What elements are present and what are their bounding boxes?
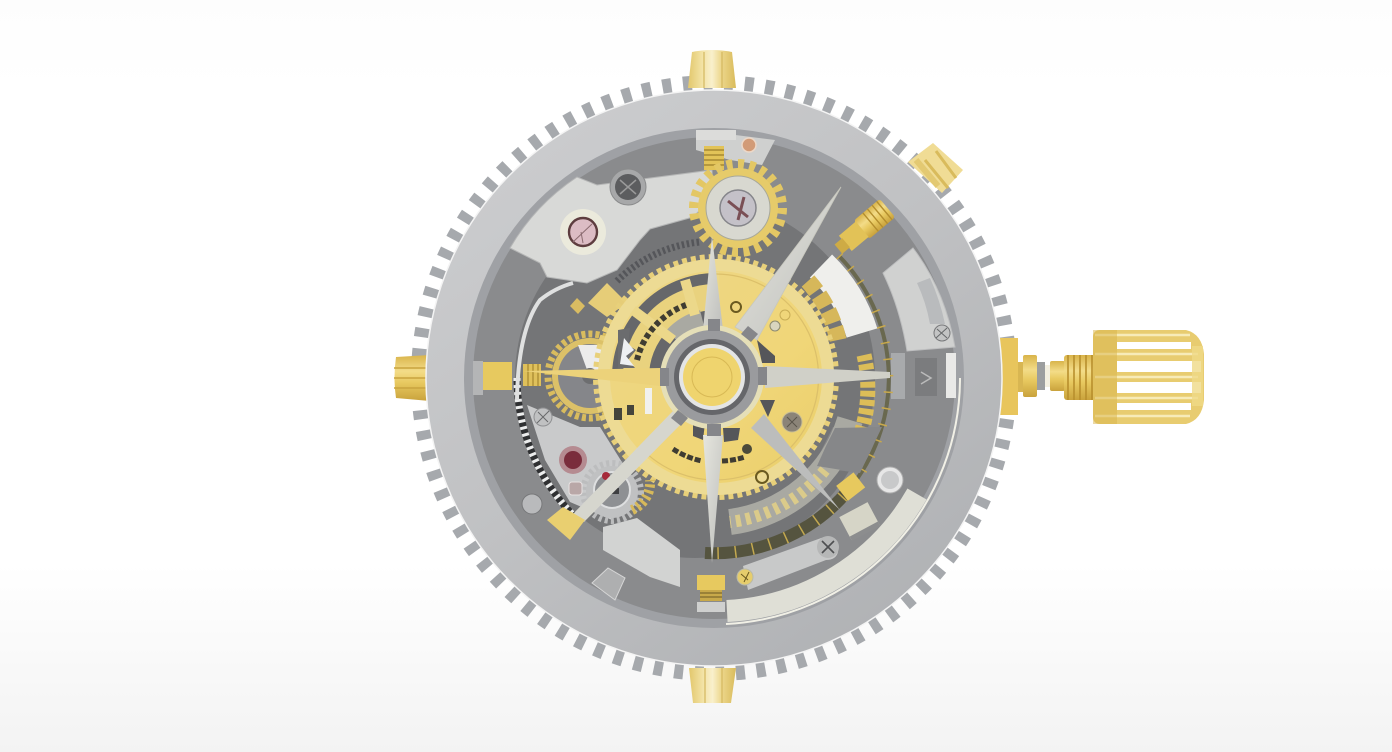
triangle marker <box>592 568 625 600</box>
movement base plate <box>473 137 955 619</box>
gear teeth rim <box>419 83 1009 673</box>
knob: bottom <box>689 668 736 703</box>
gear: lower grey-gold arc <box>730 420 850 522</box>
plate: upper left bridge <box>510 170 713 283</box>
plate: top block with copper jewel <box>696 130 775 170</box>
wheel spokes <box>633 272 716 340</box>
inner recess <box>515 198 875 558</box>
bottom post <box>697 575 725 612</box>
chain ring bottom <box>705 483 854 553</box>
sector overlay lower right <box>817 427 882 473</box>
wheel lower left pieces <box>614 388 652 420</box>
crown knurled head <box>1093 330 1204 424</box>
gold screw upper right <box>831 199 895 258</box>
screw: small pink <box>569 482 582 495</box>
inner bezel bevel <box>464 128 964 628</box>
ridged gold stack right <box>862 355 868 430</box>
small jewel on wheel <box>770 310 790 331</box>
wheel white sprocket left <box>618 328 636 368</box>
screw: grey hatch <box>534 408 552 426</box>
crown stem <box>1018 355 1050 397</box>
screw: cream jewel upper left <box>560 209 606 255</box>
wheel inner gold band <box>636 297 716 377</box>
screw on wheel <box>782 412 802 432</box>
gold block lower right <box>836 472 865 501</box>
wheel inner grey block <box>672 318 702 336</box>
crown base collar <box>1000 338 1018 415</box>
plate: lower right cream arc <box>727 494 917 611</box>
wheel pale rim <box>604 265 828 489</box>
screw: lever gold <box>737 569 753 585</box>
plate: upper right <box>883 248 955 351</box>
outer silver bezel ring <box>426 90 1002 666</box>
gear: large central wheel <box>596 257 836 497</box>
hand: upper right <box>735 187 841 340</box>
hand: down <box>703 435 723 563</box>
lever lower right <box>743 537 838 590</box>
wheel toothed rim <box>596 257 836 497</box>
lower right highlight line <box>726 378 960 624</box>
knob: top <box>688 50 736 88</box>
spring: top <box>704 146 724 170</box>
hand: lower left with gold cap <box>547 411 684 540</box>
wheel ruler line <box>640 274 819 480</box>
curved white rail left <box>517 283 573 400</box>
gear: top with lilac jewel <box>694 164 782 252</box>
screw: upper right plate <box>934 325 950 341</box>
cream block lower right <box>839 502 880 541</box>
chain ring right <box>839 256 889 483</box>
wheel skeleton upper left <box>612 273 716 377</box>
wheel dark notches around hub <box>693 340 775 442</box>
bead ring left <box>517 378 575 517</box>
wheel dark marks <box>637 305 686 360</box>
screw: maroon <box>559 446 587 474</box>
screw: dark upper <box>610 169 646 205</box>
screw: lever right <box>817 536 839 558</box>
gold blocks right segment <box>808 281 838 340</box>
hand: right <box>765 366 890 388</box>
hand: lower right <box>751 414 840 510</box>
gear: small left <box>548 334 632 418</box>
white dot right lower <box>877 467 903 493</box>
central hub <box>660 319 767 436</box>
right side block <box>891 353 956 399</box>
small mark on wheel <box>731 302 768 483</box>
knob: upper right <box>908 143 963 193</box>
gear: lower left silver <box>584 464 650 520</box>
hand: upper <box>703 236 723 330</box>
hub square lugs <box>660 319 767 436</box>
white segment plate right <box>821 266 862 333</box>
crown thread <box>1050 355 1100 400</box>
gold blocks upper left of wheel <box>570 283 627 317</box>
wheel lower dark marks <box>673 449 702 461</box>
sector: lower right grey <box>813 427 882 473</box>
wheel disc <box>598 259 834 495</box>
white dot lower left <box>522 494 542 514</box>
crown assembly: right <box>1000 330 1204 424</box>
left post <box>473 361 541 395</box>
plate: lower left <box>527 405 630 520</box>
plate: lower centre <box>603 518 680 587</box>
fine tooth arc upper <box>617 242 700 281</box>
knob: left <box>394 355 430 401</box>
hand: left gold <box>523 368 660 386</box>
